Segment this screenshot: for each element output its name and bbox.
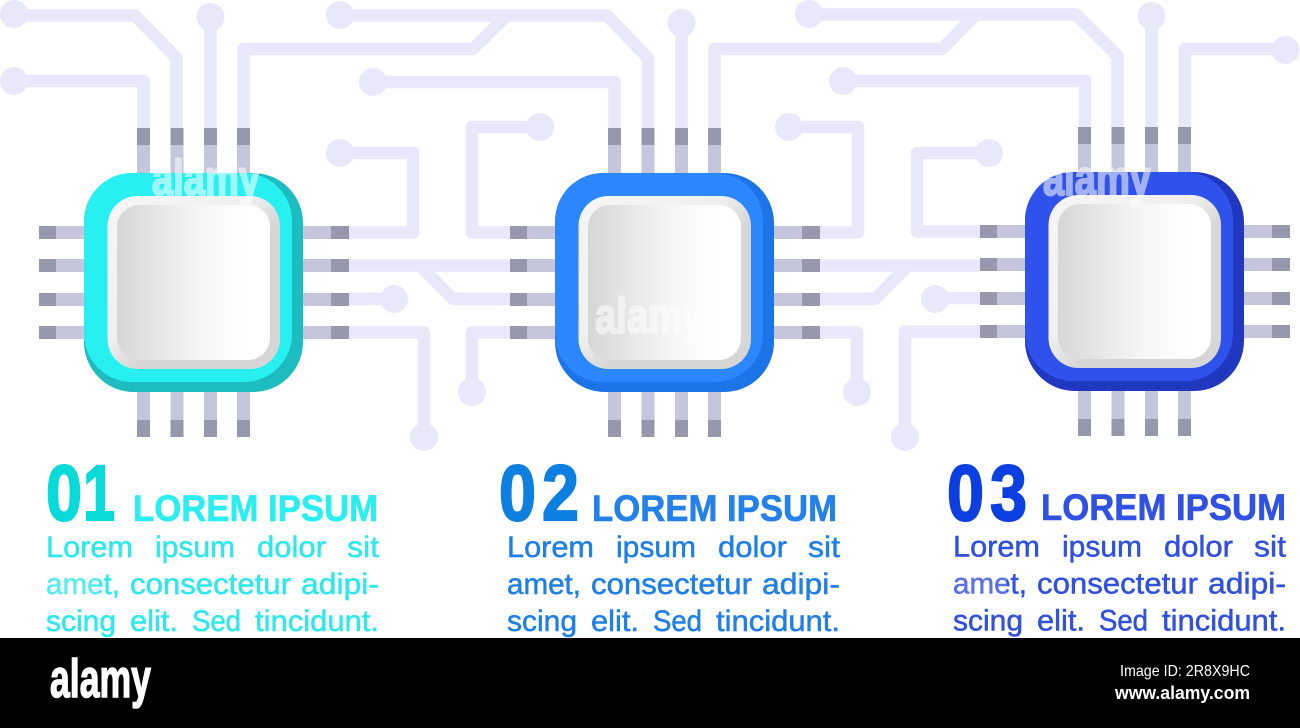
body text 3: adipi-: [1208, 568, 1286, 600]
body text 1: Sed: [192, 605, 241, 638]
number 01: 1: [83, 448, 115, 537]
body text 3: tincidunt.: [1162, 604, 1286, 638]
body text 1: scing: [46, 605, 116, 638]
chip 1: [39, 128, 349, 437]
number 02: 2: [542, 448, 579, 537]
body text 1: Lorem: [46, 531, 133, 564]
body text 2: [507, 531, 840, 638]
text block 2: [499, 448, 840, 638]
body text 2: scing: [507, 605, 577, 638]
website: www.alamy.com: [1114, 683, 1250, 703]
body text 1: elit.: [130, 605, 178, 638]
body text 2: elit.: [591, 605, 639, 638]
footer logo: alamy: [50, 649, 151, 709]
body text 2: Lorem: [507, 531, 594, 564]
body text 1: consectetur: [130, 568, 291, 601]
number 02: 0: [499, 448, 536, 537]
number 03: 0: [947, 448, 984, 537]
chip 1: alamy: [152, 150, 260, 206]
body text 1: ipsum: [155, 531, 235, 564]
body text 1: [46, 531, 379, 638]
body text 3: dolor: [1164, 530, 1233, 564]
body text 3: elit.: [1037, 604, 1085, 638]
body text 2: adipi-: [762, 568, 840, 601]
heading 1: LOREM IPSUM: [133, 488, 378, 529]
body text 2: dolor: [718, 531, 787, 564]
body text 2: tincidunt.: [716, 605, 840, 638]
body text 3: ipsum: [1062, 530, 1142, 564]
body text 3: amet,: [953, 568, 1027, 600]
body text 1: sit: [347, 531, 379, 564]
footer band: [0, 638, 1300, 728]
body text 1: amet,: [46, 568, 120, 601]
text block 1: [46, 448, 379, 638]
chip 3: [980, 127, 1290, 436]
text block 3: [947, 448, 1286, 638]
body text 2: amet,: [507, 568, 581, 601]
number 03: 3: [990, 448, 1027, 537]
chip 3: alamy: [1043, 150, 1151, 206]
body text 1: adipi-: [301, 568, 379, 601]
circuit traces: [0, 0, 1300, 451]
body text 3: scing: [953, 604, 1023, 638]
body text 2: consectetur: [591, 568, 752, 601]
body text 2: sit: [808, 531, 840, 564]
body text 3: consectetur: [1037, 568, 1198, 600]
heading 3: LOREM IPSUM: [1041, 487, 1286, 528]
body text 3: [953, 530, 1286, 638]
chip 2: [510, 128, 820, 437]
chip 2: alamy: [595, 288, 703, 344]
body text 3: Sed: [1099, 604, 1148, 638]
image id: Image ID: 2R8X9HC: [1120, 663, 1250, 680]
body text 3: sit: [1254, 530, 1286, 564]
body text 1: tincidunt.: [255, 605, 379, 638]
number 01: 0: [46, 448, 82, 537]
body text 2: Sed: [653, 605, 702, 638]
body text 2: ipsum: [616, 531, 696, 564]
heading 2: LOREM IPSUM: [592, 488, 837, 529]
body text 1: dolor: [257, 531, 326, 564]
body text 3: Lorem: [953, 530, 1040, 564]
